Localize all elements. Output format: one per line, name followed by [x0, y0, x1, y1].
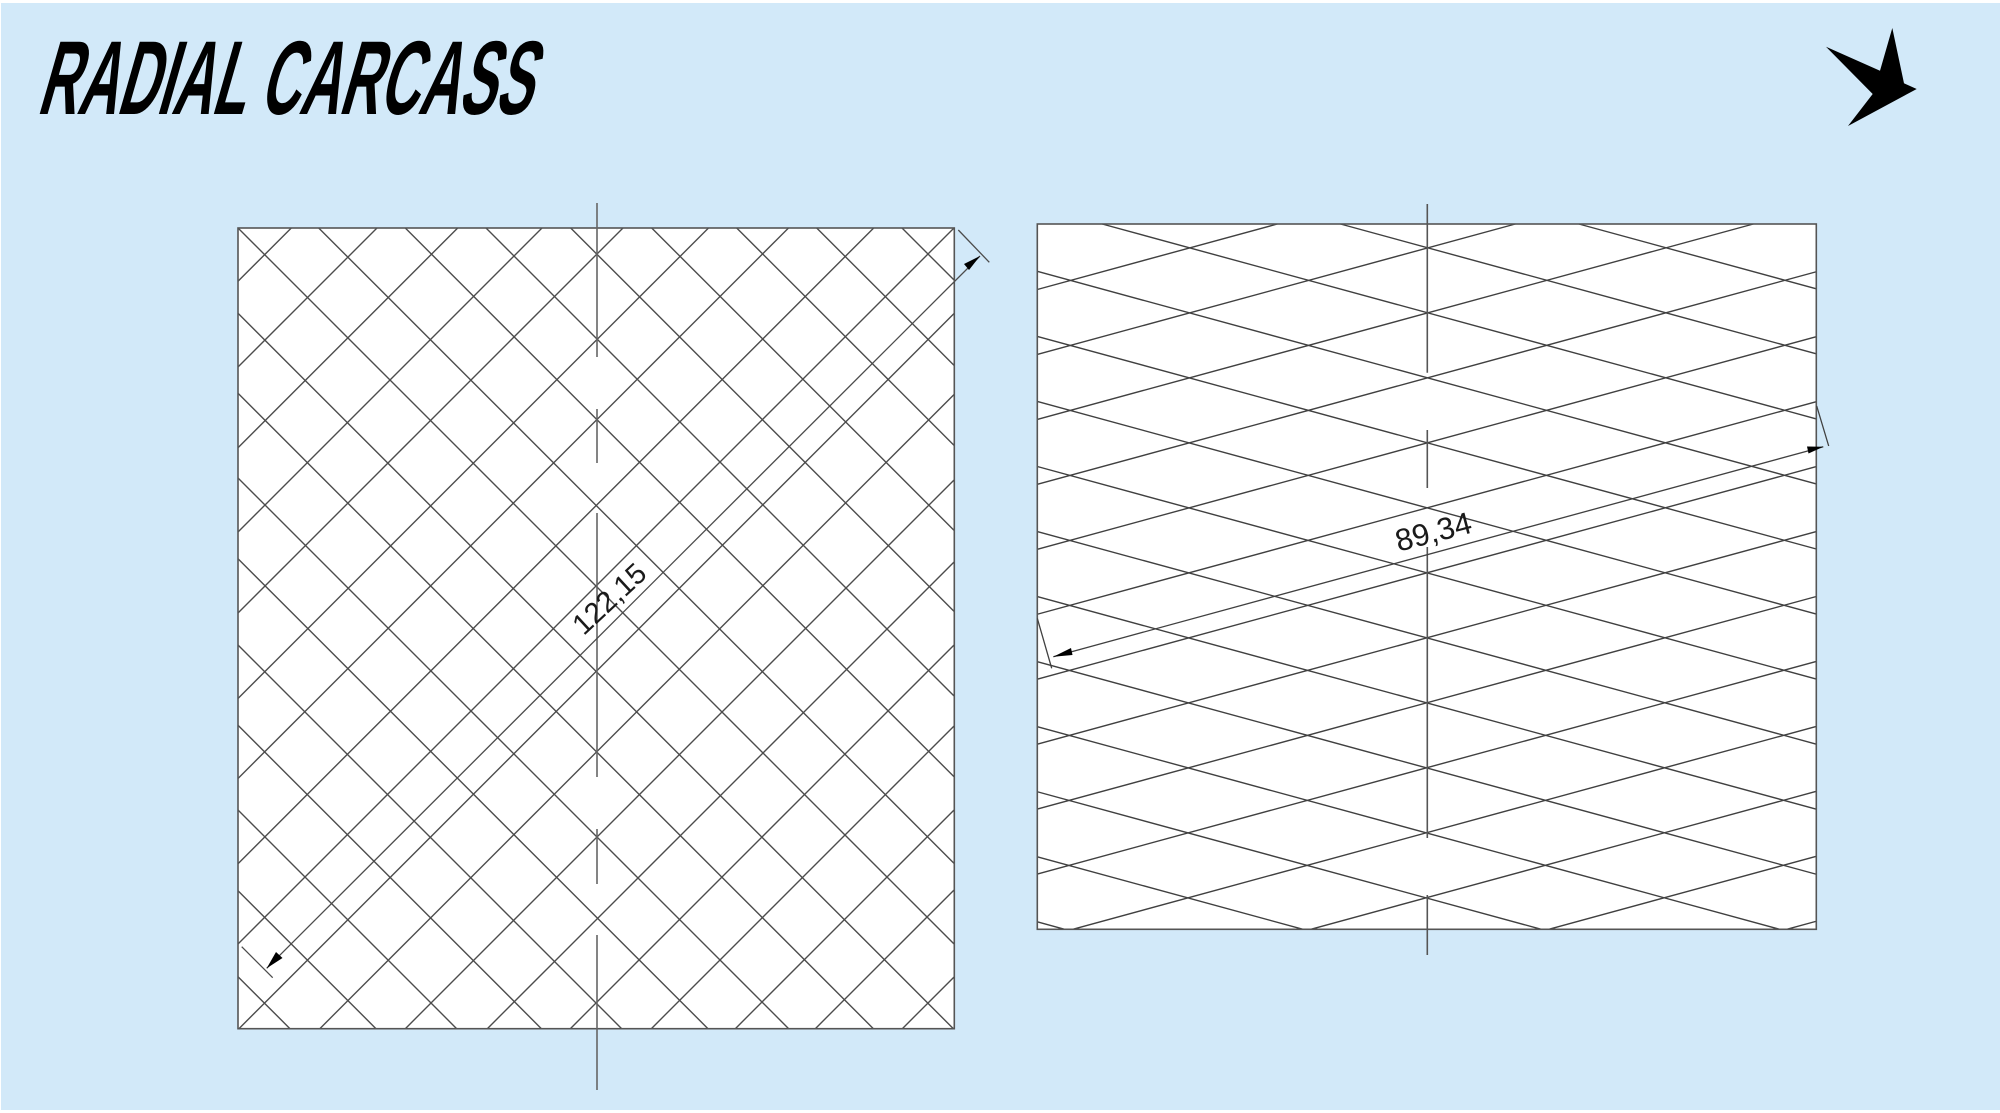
- left dimension line with arrows: [242, 230, 989, 978]
- right panel sheet: [1037, 224, 1816, 929]
- right centre line: [1426, 204, 1428, 955]
- left panel border: [238, 228, 954, 1029]
- panel: right crosshatch drawing: [1037, 204, 1829, 955]
- title: RADIAL CARCASS: [30, 19, 557, 137]
- left crosshatch lines: [238, 228, 954, 1029]
- left centre line: [596, 203, 598, 1090]
- icon: bird logo: [1826, 28, 1917, 126]
- dimension label 89,34: 89,34: [1391, 505, 1475, 558]
- panel: left crosshatch drawing: [238, 203, 989, 1090]
- left panel sheet: [238, 228, 954, 1029]
- right dimension line with arrows: [1037, 406, 1829, 668]
- right panel border: [1037, 224, 1816, 929]
- dimension label 122,15: 122,15: [567, 557, 653, 641]
- right crosshatch lines: [1037, 224, 1816, 929]
